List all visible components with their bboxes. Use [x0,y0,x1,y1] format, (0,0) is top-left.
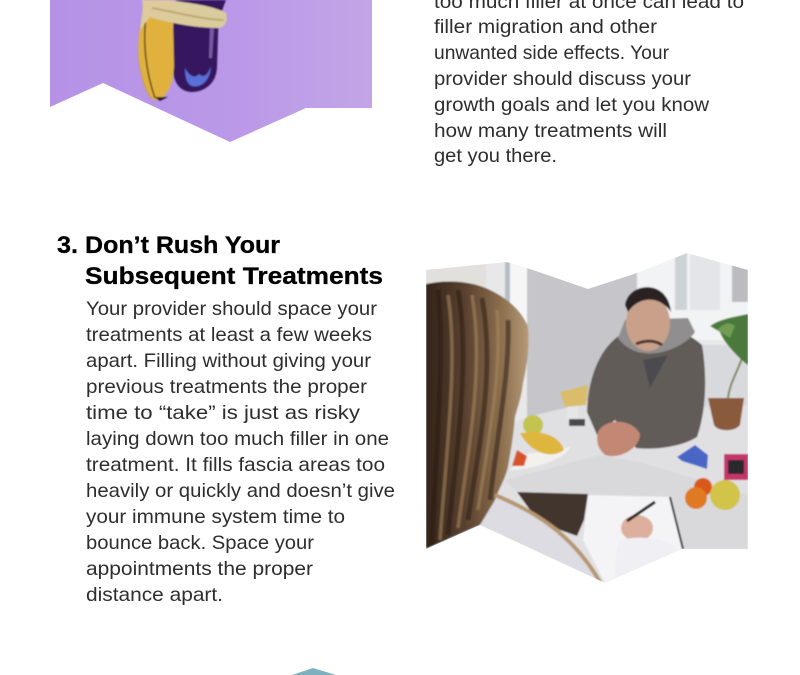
text: step 3 body: appointments the proper [86,558,314,580]
icon: eggplant [173,0,226,92]
heading: step 3: Subsequent Treatments [85,263,383,290]
heading: step 3 [57,232,383,290]
photo: consultation at a table [426,250,748,590]
woman: hair [426,282,529,549]
text: step 3 body: distance apart. [86,584,223,606]
text: step 2 continued: filler migration and other [434,16,658,38]
text: step 3 body: apart. Filling without giving your [86,350,372,372]
fruit bowl [510,447,570,470]
text: step 3 body: treatments at least a few weeks [86,324,372,346]
wall [527,268,640,420]
heading: step 3: 3. [57,232,78,259]
text: step 3 body: bounce back. Space your [86,532,315,554]
woman: coat [480,498,605,583]
text: step 3 body: treatment. It fills fascia areas too [86,454,385,476]
text: step 2 continued [434,0,744,167]
text: step 3 body: heavily or quickly and doesn’t give [86,480,395,502]
stapler and stamp [677,445,708,469]
sleeve [628,536,647,542]
clipboard [583,495,683,583]
text: step 2 continued: get you there. [434,145,557,167]
window [426,264,486,288]
icon: banana [138,12,174,100]
icon: banana peel band [140,0,227,30]
text: step 3 body [86,298,395,606]
heading: step 3: Don’t Rush Your [85,232,280,259]
text: step 3 body: your immune system time to [86,506,345,528]
photo: banana and eggplant on purple background [50,0,372,145]
text: step 3 body: time to “take” is just as risky [86,402,360,424]
man: head and hair [626,295,670,351]
next section hexagon peek [292,668,336,675]
icon: plant [726,358,744,400]
table [500,406,746,570]
text: step 3 body: previous treatments the proper [86,376,368,398]
vase [567,405,578,420]
man: hoodie [587,328,705,449]
text: step 2 continued: unwanted side effects. Your [434,42,669,64]
text: step 2 continued: how many treatments will [434,120,667,142]
text: step 2 continued: growth goals and let you know [434,94,710,116]
tablet [517,492,588,536]
hand and pen [621,515,653,541]
oranges and apple [694,478,712,496]
text: step 3 body: laying down too much filler in one [86,428,389,450]
man: hands [597,422,640,456]
text: step 2 continued: provider should discuss your [434,68,692,90]
text: step 3 body: Your provider should space your [86,298,378,320]
